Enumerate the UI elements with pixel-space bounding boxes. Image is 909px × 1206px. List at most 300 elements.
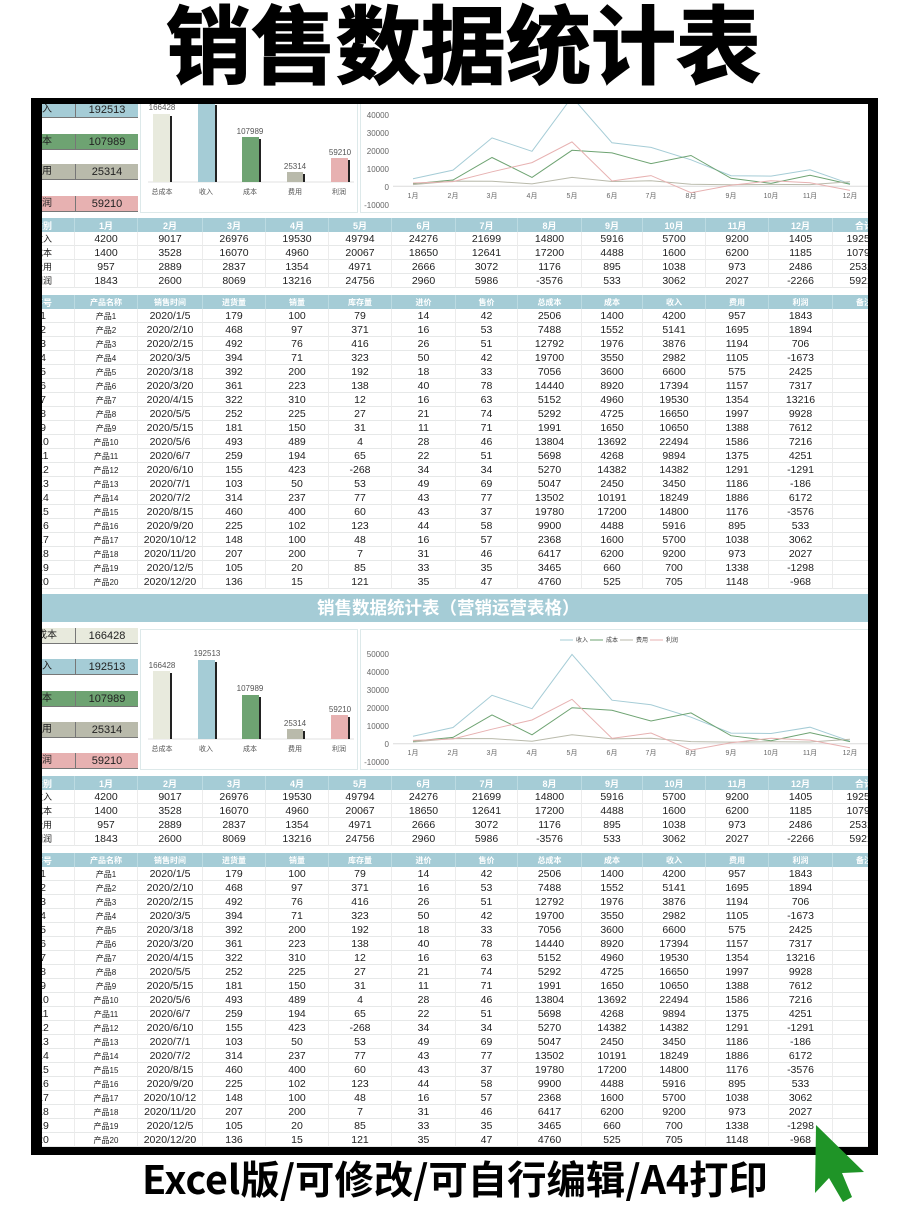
product table 1: 14800 xyxy=(659,506,689,518)
product table 2: 产品9 xyxy=(96,982,116,991)
product table 2: 售价 xyxy=(478,856,494,865)
product table 2: 9894 xyxy=(662,1008,686,1020)
product table 2: 1291 xyxy=(725,1022,749,1034)
product table 1: 37 xyxy=(481,506,492,518)
panel: lower line chart: -10000 xyxy=(364,758,390,767)
summary: revenue xyxy=(12,659,138,675)
product table 1: 200 xyxy=(288,548,306,560)
summary: revenue: 192513 xyxy=(89,104,125,116)
product table 1: 2020/3/18 xyxy=(147,366,193,378)
monthly table 2 xyxy=(42,776,868,846)
product table 1: 660 xyxy=(603,562,621,574)
monthly table 2: 4200 xyxy=(94,791,118,803)
product table 2: 1695 xyxy=(725,882,749,894)
product table 1: 产品16 xyxy=(94,522,118,531)
summary: cost xyxy=(12,691,138,707)
product table 1: 1338 xyxy=(725,562,749,574)
product table 1: 26 xyxy=(418,338,429,350)
summary: revenue xyxy=(12,102,138,118)
product table 1: 6200 xyxy=(600,548,624,560)
product table 1: 进货量 xyxy=(222,298,246,307)
product table 1: 78 xyxy=(481,380,492,392)
product table 1: 2020/3/5 xyxy=(150,352,190,364)
product table 2: 2368 xyxy=(538,1092,561,1104)
product table 2: 5141 xyxy=(662,882,686,894)
summary: profit xyxy=(12,753,138,769)
product table 2: 957 xyxy=(728,868,746,880)
product table 2: 76 xyxy=(291,896,303,908)
monthly table 1: 8月 xyxy=(542,221,556,231)
product table 2: 42 xyxy=(481,868,492,880)
panel: top line chart: 40000 xyxy=(367,111,390,120)
panel: lower line chart: 9月 xyxy=(726,749,736,757)
monthly table 1 xyxy=(42,218,868,288)
product table 2: 库存量 xyxy=(348,856,372,865)
product table 2: 103 xyxy=(225,1036,243,1048)
product table 1: 322 xyxy=(225,394,243,406)
product table 2: 51 xyxy=(481,1008,492,1020)
chart legend: 成本 xyxy=(606,636,618,644)
monthly table 2: 895 xyxy=(603,819,621,831)
monthly table 2: 1185 xyxy=(789,805,812,817)
summary: revenue: 192513 xyxy=(89,661,125,673)
product table 2: 493 xyxy=(225,994,243,1006)
product table 1: 产品4 xyxy=(96,354,116,363)
product table 2: 31 xyxy=(354,980,366,992)
monthly table 1: 6月 xyxy=(416,221,430,231)
product table 1: 100 xyxy=(288,310,306,322)
product table 1: 973 xyxy=(728,548,746,560)
monthly table 2: 21699 xyxy=(472,791,501,803)
product table 1: 237 xyxy=(288,492,306,504)
product table 2: 11 xyxy=(418,980,429,992)
panel: top line chart: 0 xyxy=(385,183,390,192)
product table 2: 2020/12/5 xyxy=(147,1120,193,1132)
product table 2: 525 xyxy=(603,1134,621,1146)
product table 1: 5152 xyxy=(538,394,561,406)
monthly table 2: 4960 xyxy=(285,805,309,817)
product table 2: 16650 xyxy=(659,966,689,978)
product table 2: 533 xyxy=(792,1078,809,1090)
monthly table 1: 5916 xyxy=(600,233,624,245)
product table 1: 1991 xyxy=(538,422,561,434)
product table 2: 3876 xyxy=(662,896,686,908)
panel: lower line chart: 7月 xyxy=(646,749,656,757)
product table 2: 43 xyxy=(418,1064,429,1076)
product table 1: 7317 xyxy=(789,380,812,392)
product table 1: 4 xyxy=(357,436,363,448)
monthly table 1: 2666 xyxy=(412,261,435,273)
product table 2: 2020/3/18 xyxy=(147,924,193,936)
product table 1: 252 xyxy=(225,408,243,420)
product table 2: 4725 xyxy=(600,966,624,978)
product table 2: 77 xyxy=(481,1050,492,1062)
panel: top line chart: 5月 xyxy=(567,192,577,200)
section banner: 销售数据统计表（营销运营表格） xyxy=(317,598,580,618)
panel: top summary boxes xyxy=(42,104,138,212)
monthly table 1: 2027 xyxy=(725,275,749,287)
panel: lower line chart: 12月 xyxy=(843,749,857,757)
product table 1: 310 xyxy=(288,394,306,406)
product table 2: 产品5 xyxy=(96,926,116,935)
product table 2: 8920 xyxy=(600,938,624,950)
product table 2: 18 xyxy=(418,924,429,936)
monthly table 2: 3月 xyxy=(227,779,241,789)
product table 2: 1375 xyxy=(725,1008,749,1020)
product table 1: 100 xyxy=(288,534,306,546)
product table 2: 6417 xyxy=(538,1106,561,1118)
panel: lower bar chart: 费用 xyxy=(288,744,302,753)
monthly table 1: 49794 xyxy=(345,233,375,245)
summary: cost: 107989 xyxy=(89,693,125,705)
product table 2: 21 xyxy=(418,966,429,978)
panel: top line chart: 20000 xyxy=(367,147,390,156)
monthly table 1: 21699 xyxy=(472,233,501,245)
monthly table 2: -2266 xyxy=(787,833,814,845)
product table 2: 150 xyxy=(288,980,306,992)
monthly table 2: 2600 xyxy=(158,833,182,845)
product table 1: 7216 xyxy=(789,436,812,448)
product table 2: 6600 xyxy=(662,924,686,936)
product table 2: 产品8 xyxy=(96,968,116,977)
product table 1: 1186 xyxy=(726,478,748,490)
monthly table 1: 5700 xyxy=(662,233,686,245)
product table 1: 957 xyxy=(728,310,746,322)
product table 2: 4488 xyxy=(600,1078,624,1090)
product table 1: 150 xyxy=(288,422,306,434)
product table 1: 65 xyxy=(354,450,366,462)
product table 1: 42 xyxy=(481,310,492,322)
product table 2: 69 xyxy=(481,1036,492,1048)
product table 1: 48 xyxy=(354,534,366,546)
monthly table 1: 2837 xyxy=(222,261,246,273)
product table 1: 5141 xyxy=(662,324,686,336)
product table 2: 53 xyxy=(481,882,492,894)
monthly table 1: 14800 xyxy=(535,233,564,245)
product table 2: 14440 xyxy=(535,938,564,950)
monthly table 2: 18650 xyxy=(409,805,438,817)
panel: top line chart: 7月 xyxy=(646,192,656,200)
product table 2: 259 xyxy=(225,1008,243,1020)
product table 1: 525 xyxy=(603,576,621,588)
product table 1: 225 xyxy=(225,520,243,532)
product table 1: 2020/1/5 xyxy=(150,310,190,322)
monthly table 1: 4971 xyxy=(348,261,372,273)
monthly table 1: 1405 xyxy=(789,233,812,245)
product table 2: 225 xyxy=(225,1078,243,1090)
monthly table 1: 2月 xyxy=(163,221,177,231)
product table 2: 50 xyxy=(418,910,429,922)
product table 2: 34 xyxy=(481,1022,492,1034)
product table 2: 705 xyxy=(665,1134,683,1146)
panel: top line chart: 12月 xyxy=(843,192,857,200)
product table 1: 3600 xyxy=(600,366,624,378)
product table 2: 19700 xyxy=(535,910,564,922)
product table 1: 706 xyxy=(792,338,809,350)
product table 1: 207 xyxy=(225,548,243,560)
product table 1: 42 xyxy=(481,352,492,364)
product table 2: 85 xyxy=(354,1120,366,1132)
monthly table 1: 1400 xyxy=(94,247,118,259)
product table 2: 123 xyxy=(351,1078,369,1090)
panel: lower line chart: 1月 xyxy=(408,749,418,757)
chart legend: 费用 xyxy=(636,636,648,644)
product table 2: 42 xyxy=(481,910,492,922)
monthly table 1: 20067 xyxy=(345,247,375,259)
monthly table 2: 6月 xyxy=(416,779,430,789)
product table 2: 57 xyxy=(481,1092,492,1104)
product table 1: 50 xyxy=(291,478,303,490)
product table 1: 423 xyxy=(288,464,306,476)
panel: top bar chart: 费用 xyxy=(288,187,302,196)
product table 1: 2020/2/10 xyxy=(147,324,193,336)
product table 2: 1886 xyxy=(725,1050,749,1062)
product table 1: 2020/5/15 xyxy=(147,422,193,434)
product table 1: 1176 xyxy=(726,506,748,518)
product table 2: 5700 xyxy=(662,1092,686,1104)
product table 2: 200 xyxy=(288,924,306,936)
monthly table 2: 19530 xyxy=(282,791,312,803)
product table 1: 10650 xyxy=(659,422,689,434)
product table 1 xyxy=(42,295,868,589)
product table 2: 14 xyxy=(418,868,429,880)
product table 2: 53 xyxy=(354,1036,366,1048)
product table 2: 产品16 xyxy=(94,1080,118,1089)
product table 1: 1600 xyxy=(600,534,624,546)
chart legend xyxy=(560,636,678,644)
monthly table 1: -3576 xyxy=(536,275,563,287)
product table 1: 14 xyxy=(418,310,429,322)
product table 1: 194 xyxy=(288,450,306,462)
product table 1: 79 xyxy=(354,310,366,322)
product table 1: 8920 xyxy=(600,380,624,392)
product table 2: 17200 xyxy=(597,1064,627,1076)
monthly table 2: 1400 xyxy=(94,805,118,817)
panel: lower summary boxes xyxy=(42,628,138,769)
product table 1: 7612 xyxy=(789,422,812,434)
product table 2: 323 xyxy=(351,910,369,922)
panel: lower line chart: 40000 xyxy=(367,668,390,677)
panel: lower bar chart: 收入 xyxy=(199,744,213,753)
product table 1: 2020/3/20 xyxy=(147,380,193,392)
monthly table 1: 973 xyxy=(728,261,746,273)
product table 1: 2450 xyxy=(600,478,624,490)
product table 1: 16650 xyxy=(659,408,689,420)
monthly table 2: 12月 xyxy=(791,779,810,789)
product table 2: 2020/3/20 xyxy=(147,938,193,950)
product table 1: 9894 xyxy=(662,450,686,462)
monthly table 1: 1600 xyxy=(662,247,686,259)
product table 1: 11 xyxy=(418,422,429,434)
product table 1: 2368 xyxy=(538,534,561,546)
product table 1: -968 xyxy=(790,576,811,588)
monthly table 2: 17200 xyxy=(535,805,564,817)
product table 1: 产品20 xyxy=(94,578,118,587)
product table 1: 2020/8/15 xyxy=(147,506,193,518)
monthly table 1: 12月 xyxy=(791,221,810,231)
product table 2: 5916 xyxy=(662,1078,686,1090)
product table 2: 1843 xyxy=(789,868,812,880)
product table 2: 2020/3/5 xyxy=(150,910,190,922)
product table 2: 2020/6/7 xyxy=(150,1008,190,1020)
product table 1: 16 xyxy=(418,534,429,546)
product table 1: 3062 xyxy=(789,534,812,546)
product table 1: 16 xyxy=(418,394,429,406)
product table 2: 314 xyxy=(225,1050,243,1062)
monthly table 1: 7月 xyxy=(479,221,494,231)
product table 2: 136 xyxy=(225,1134,243,1146)
product table 2: 35 xyxy=(481,1120,492,1132)
product table 1: 5047 xyxy=(538,478,561,490)
product table 1: 2506 xyxy=(538,310,561,322)
product table 2: 7317 xyxy=(789,938,812,950)
product table 2: 产品7 xyxy=(96,954,116,963)
product table 1: 489 xyxy=(288,436,306,448)
monthly table 1: 16070 xyxy=(219,247,249,259)
product table 1: 19530 xyxy=(659,394,689,406)
product table 1: 16 xyxy=(418,324,429,336)
spreadsheet screenshot xyxy=(42,104,868,1147)
panel: lower bar chart: 192513 xyxy=(194,649,221,658)
product table 2: 7 xyxy=(357,1106,363,1118)
product table 2: 49 xyxy=(418,1036,429,1048)
product table 1: 77 xyxy=(481,492,492,504)
summary: cost: 107989 xyxy=(89,136,125,148)
product table 1: 1148 xyxy=(726,576,748,588)
product table 2: 销量 xyxy=(289,856,305,865)
monthly table 2: 1176 xyxy=(538,819,561,831)
monthly table 1: 2486 xyxy=(789,261,812,273)
product table 2: 2450 xyxy=(600,1036,624,1048)
product table 2: 16 xyxy=(418,1092,429,1104)
product table 2: 44 xyxy=(418,1078,429,1090)
product table 2: 13692 xyxy=(597,994,627,1006)
panel: top line chart: 3月 xyxy=(487,192,497,200)
monthly table 2: 6200 xyxy=(725,805,749,817)
monthly table 1: 17200 xyxy=(535,247,564,259)
monthly table 2: 24756 xyxy=(345,833,375,845)
product table 2: 74 xyxy=(481,966,492,978)
product table 2: 14382 xyxy=(597,1022,627,1034)
panel: lower bar chart: 总成本 xyxy=(152,744,172,753)
product table 1: 1976 xyxy=(600,338,624,350)
product table 1: 产品7 xyxy=(96,396,116,405)
product table 2: 200 xyxy=(288,1106,306,1118)
monthly table 1: 1185 xyxy=(789,247,812,259)
product table 2: 2982 xyxy=(662,910,686,922)
panel: lower bar chart: 59210 xyxy=(329,705,352,714)
product table 2: 63 xyxy=(481,952,492,964)
monthly table 2: 9月 xyxy=(605,779,619,789)
product table 2: 155 xyxy=(225,1022,243,1034)
panel: lower bar chart: 成本 xyxy=(243,744,257,753)
product table 2: 468 xyxy=(225,882,243,894)
monthly table 1: 24276 xyxy=(409,233,438,245)
product table 1: 5700 xyxy=(662,534,686,546)
product table 2: 9200 xyxy=(662,1106,686,1118)
product table 2: 33 xyxy=(481,924,492,936)
monthly table 2: 973 xyxy=(728,819,746,831)
panel: lower line chart: 11月 xyxy=(803,749,817,757)
panel: top line chart: 6月 xyxy=(607,192,617,200)
product table 2: 492 xyxy=(225,896,243,908)
product table 2: 48 xyxy=(354,1092,366,1104)
product table 2: 10650 xyxy=(659,980,689,992)
product table 1: 19780 xyxy=(535,506,564,518)
monthly table 1: -2266 xyxy=(787,275,814,287)
product table 2: 78 xyxy=(481,938,492,950)
product table 1: 售价 xyxy=(478,298,494,307)
product table 1: 40 xyxy=(418,380,429,392)
monthly table 2: 9017 xyxy=(158,791,182,803)
product table 1: 895 xyxy=(728,520,746,532)
monthly table 1: 11月 xyxy=(728,221,746,231)
product table 2: 产品10 xyxy=(94,996,118,1005)
product table 2: 产品19 xyxy=(94,1122,118,1131)
product table 1: 394 xyxy=(225,352,243,364)
product table 1: 77 xyxy=(354,492,366,504)
product table 2: 77 xyxy=(354,1050,366,1062)
monthly table 2: 2889 xyxy=(158,819,182,831)
panel: top line chart xyxy=(360,72,880,213)
panel: top line chart: 10000 xyxy=(367,165,390,174)
product table 1: 31 xyxy=(418,548,429,560)
product table 2: 2020/7/2 xyxy=(150,1050,190,1062)
product table 2: 194 xyxy=(288,1008,306,1020)
product table 2: 207 xyxy=(225,1106,243,1118)
monthly table 1: 9017 xyxy=(158,233,182,245)
product table 2: 10191 xyxy=(597,1050,627,1062)
product table 2: 1997 xyxy=(725,966,749,978)
monthly table 2: 5986 xyxy=(475,833,498,845)
monthly table 2: 49794 xyxy=(345,791,375,803)
monthly table 1: 3528 xyxy=(158,247,182,259)
panel: lower line chart: 10月 xyxy=(764,749,778,757)
product table 1: 148 xyxy=(225,534,243,546)
product table 2: 产品12 xyxy=(94,1024,118,1033)
monthly table 2: 14800 xyxy=(535,791,564,803)
product table 1: 13216 xyxy=(786,394,815,406)
product table 2: 2020/1/5 xyxy=(150,868,190,880)
product table 1: 71 xyxy=(481,422,492,434)
product table 2: 产品15 xyxy=(94,1066,118,1075)
product table 1: 19700 xyxy=(535,352,564,364)
product table 1: 2027 xyxy=(789,548,812,560)
product table 1: -268 xyxy=(349,464,370,476)
product table 2: 51 xyxy=(481,896,492,908)
monthly table 1: 6200 xyxy=(725,247,749,259)
product table 2: 2020/10/12 xyxy=(144,1092,196,1104)
product table 2: 13804 xyxy=(535,994,564,1006)
product table 1: 2020/4/15 xyxy=(147,394,193,406)
product table 1: 9928 xyxy=(789,408,812,420)
product table 2: 7056 xyxy=(538,924,561,936)
summary: expenses: 25314 xyxy=(92,166,122,178)
product table 2: 19780 xyxy=(535,1064,564,1076)
product table 2: 361 xyxy=(225,938,243,950)
product table 1: 34 xyxy=(418,464,429,476)
product table 2: 2506 xyxy=(538,868,561,880)
product table 1: 2020/7/2 xyxy=(150,492,190,504)
panel: top bar chart: 59210 xyxy=(329,148,352,157)
product table 1: 63 xyxy=(481,394,492,406)
product table 1: 产品6 xyxy=(96,382,116,391)
monthly table 1: 2889 xyxy=(158,261,182,273)
product table 1: 4200 xyxy=(662,310,686,322)
product table 2: 5270 xyxy=(538,1022,561,1034)
product table 1: 5292 xyxy=(538,408,561,420)
product table 2: 12 xyxy=(354,952,366,964)
